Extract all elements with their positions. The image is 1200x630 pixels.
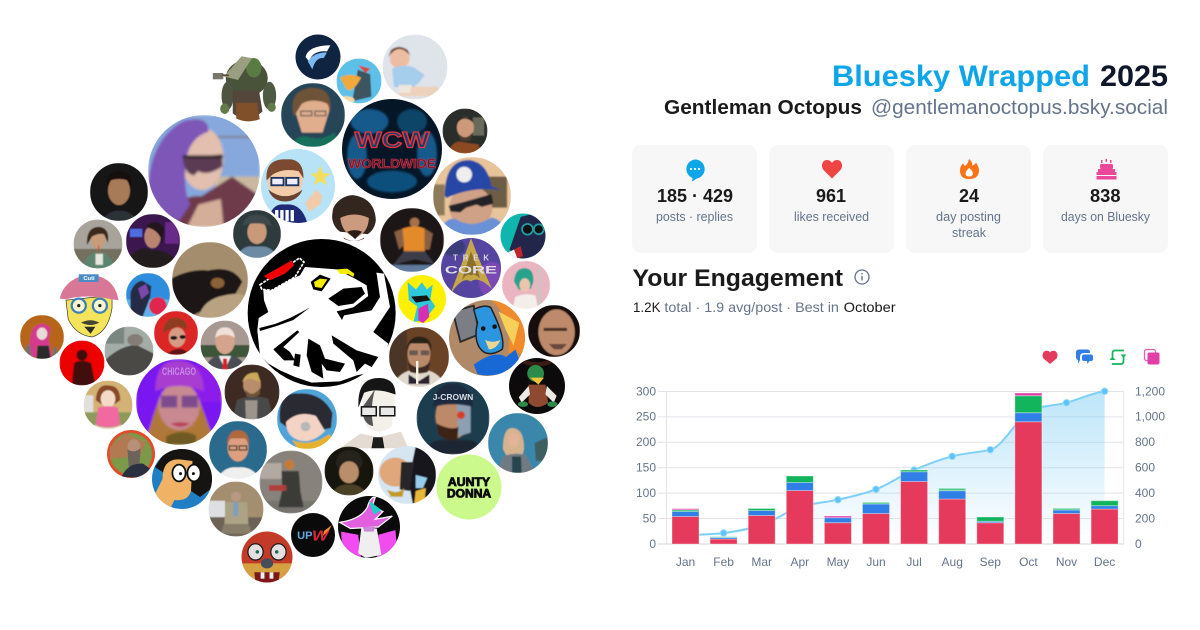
bar: Apr — [786, 476, 813, 544]
profile name and handle — [664, 97, 1168, 119]
avatar: Trek Core badge: CORE — [445, 264, 497, 276]
icon: legend heart — [1042, 351, 1058, 364]
icon: heart — [822, 160, 842, 178]
avatar: glasses man teal wall — [209, 421, 267, 479]
avatar: WCW Worldwide: WCW — [354, 128, 430, 152]
avatar: blue cap man — [433, 157, 511, 235]
month labels: Nov — [1056, 555, 1077, 569]
month labels: Dec — [1094, 555, 1115, 569]
left axis labels: 200 — [636, 435, 656, 449]
avatar: UPW logo: W — [312, 529, 330, 545]
avatar: pink cap yellow man: Cuti — [83, 276, 95, 282]
avatar: Chicago beanie woman — [136, 359, 222, 445]
month labels: Jan — [676, 555, 695, 569]
avatar: rainbow ring bearded man — [107, 430, 155, 478]
icon: info — [855, 270, 869, 284]
stat card: days on Bluesky: days on Bluesky — [1061, 209, 1150, 224]
cumulative area — [686, 391, 1105, 544]
avatar: Trek Core badge — [441, 238, 506, 298]
engagement summary: total · 1.9 avg/post · Best in — [664, 299, 839, 315]
month labels: Mar — [751, 555, 772, 569]
right axis labels: 600 — [1135, 460, 1155, 474]
right axis labels: 800 — [1135, 435, 1155, 449]
bar: Dec — [1091, 501, 1118, 544]
stat card: days on Bluesky: 838 — [1090, 186, 1120, 206]
left axis labels: 100 — [636, 486, 656, 500]
avatar: bitmoji bearded man — [261, 149, 335, 223]
month labels: Aug — [942, 555, 963, 569]
avatar: wrestler orange — [380, 208, 444, 272]
bar: Oct — [1015, 393, 1042, 544]
engagement summary — [633, 299, 896, 315]
avatar: UPW logo — [291, 513, 335, 557]
month labels: Jun — [866, 555, 886, 569]
avatar: cigarette man — [389, 327, 449, 387]
engagement chart — [636, 384, 1165, 569]
avatar: grey fox with chainsaw — [260, 450, 322, 514]
right axis labels: 400 — [1135, 486, 1155, 500]
right axis labels: 200 — [1135, 512, 1155, 526]
icon: chat bubble — [686, 159, 705, 182]
bar: Jul — [901, 470, 928, 544]
avatar: suited man — [200, 320, 250, 370]
avatar: pink cap yellow man — [60, 274, 118, 337]
avatar detail: cigarette — [416, 361, 418, 384]
stat card: day posting streak: day posting — [936, 209, 1001, 224]
avatar: wizard — [338, 496, 400, 558]
avatar: man in cap — [233, 210, 281, 258]
chart grid and axes — [658, 391, 1124, 544]
month labels: Jul — [906, 555, 922, 569]
avatar: baby — [382, 34, 448, 100]
month labels: Apr — [790, 555, 809, 569]
avatar: tabby cat — [104, 326, 154, 376]
bar: Jun — [862, 502, 890, 544]
month labels — [676, 555, 1115, 569]
avatar: cartoon bird — [336, 58, 382, 104]
engagement summary: 1.2K — [633, 299, 661, 315]
avatar: sleepy dog — [172, 242, 248, 318]
icon: legend quotes — [1144, 350, 1160, 364]
stat card: day posting streak — [906, 145, 1031, 253]
stat card: posts and replies: posts · replies — [656, 209, 733, 224]
month labels: Oct — [1019, 555, 1038, 569]
avatar: Vader glasses — [500, 214, 546, 258]
avatar: WCW Worldwide: WORLDWIDE — [348, 156, 436, 171]
cumulative line — [686, 391, 1105, 535]
stacked bars — [672, 393, 1118, 544]
avatar: red cartoon face — [242, 532, 292, 582]
avatar: Aunty Donna: DONNA — [447, 487, 492, 500]
avatar: bearded man dark — [442, 108, 488, 154]
right axis labels: 1,200 — [1135, 384, 1165, 398]
avatar: Aunty Donna — [436, 454, 502, 520]
bar: May — [824, 516, 851, 544]
icon: legend reposts — [1110, 350, 1126, 364]
heading: Your Engagement: Your Engagement — [632, 265, 843, 292]
stat card: likes received: 961 — [816, 186, 846, 206]
avatar: green hair woman — [502, 261, 550, 309]
avatar: glasses cartoon — [152, 449, 212, 509]
avatar: UPW logo: UP — [297, 530, 313, 542]
left axis labels: 150 — [636, 460, 656, 474]
avatar: parrot character — [509, 358, 565, 414]
avatar: red silhouette — [60, 340, 104, 386]
avatar detail: Chicago beanie text: CHICAGO — [162, 366, 196, 378]
stat card: day posting streak: 24 — [959, 186, 979, 206]
left axis labels: 0 — [649, 537, 656, 551]
avatar: blonde woman — [488, 413, 548, 473]
stat card: likes received: likes received — [794, 209, 869, 224]
month labels: May — [827, 555, 849, 569]
avatar: Trek Core badge: TREK — [453, 253, 489, 263]
bar: Feb — [710, 536, 737, 544]
avatar: man purple neon — [126, 214, 180, 268]
stat card: days on Bluesky — [1043, 145, 1168, 253]
icon: flame — [960, 159, 979, 179]
avatar: blond bearded man — [224, 364, 280, 420]
bar: Aug — [939, 488, 966, 544]
avatar: Aunty Donna: AUNTY — [448, 476, 490, 489]
avatar: dark hair cartoon — [331, 195, 377, 241]
avatar: red hair sunglasses — [154, 311, 198, 355]
right axis labels — [1135, 384, 1165, 551]
avatar: WCW Worldwide — [342, 99, 442, 199]
avatar: young man with drink — [74, 220, 122, 268]
left axis labels: 50 — [643, 512, 656, 526]
right axis labels: 1,000 — [1135, 410, 1165, 424]
stat card: posts and replies — [632, 145, 757, 253]
avatar: beanie man — [324, 446, 374, 496]
avatar: bald man close-up — [528, 305, 580, 357]
avatar detail: J-Crown cap text: J-CROWN — [433, 392, 473, 402]
avatar: giant pixel octopus — [248, 239, 396, 387]
stat card: day posting streak: streak — [952, 225, 986, 240]
avatar: cartoon woman pink top — [84, 380, 132, 430]
avatar: potion character — [449, 300, 525, 376]
left axis labels: 300 — [636, 384, 656, 398]
stat card: likes received — [769, 145, 894, 253]
left axis labels — [636, 384, 656, 551]
bar: Nov — [1053, 508, 1080, 544]
avatar: F logo — [296, 34, 340, 80]
icon: legend replies — [1076, 350, 1093, 364]
cumulative dots — [720, 388, 1108, 536]
avatar: pink hair woman — [20, 315, 64, 359]
avatar: Kumail portrait — [90, 163, 148, 221]
left axis labels: 250 — [636, 410, 656, 424]
avatar: reflection helmet — [378, 446, 436, 504]
avatar: J-Crown cyborg — [416, 382, 490, 454]
avatar: bw illustrated man — [340, 378, 408, 448]
right axis labels: 0 — [1135, 537, 1142, 551]
avatar: anime girl — [277, 389, 337, 449]
avatar: glasses man teal — [281, 83, 345, 147]
icon: cake — [1096, 159, 1116, 180]
bar: Sep — [977, 517, 1004, 544]
month labels: Feb — [713, 555, 734, 569]
month labels: Sep — [980, 555, 1001, 569]
avatar: purple hair woman — [148, 115, 260, 227]
profile name and handle: @gentlemanoctopus.bsky.social — [871, 97, 1168, 119]
engagement summary: October — [844, 299, 896, 315]
bar: Jan — [672, 508, 699, 544]
avatar bubble cluster — [20, 34, 580, 582]
title: Bluesky Wrapped — [832, 60, 1090, 93]
avatar: fox on yellow — [398, 275, 446, 323]
title: 2025 — [1100, 60, 1168, 93]
stat card: posts and replies: 185 · 429 — [657, 186, 733, 206]
avatar: sitting man — [208, 482, 264, 536]
legend icons — [1042, 350, 1160, 364]
avatar: orc — [213, 56, 276, 121]
avatar: red flower character — [126, 273, 170, 317]
profile name and handle: Gentleman Octopus — [664, 97, 862, 119]
bar: Mar — [748, 508, 775, 544]
